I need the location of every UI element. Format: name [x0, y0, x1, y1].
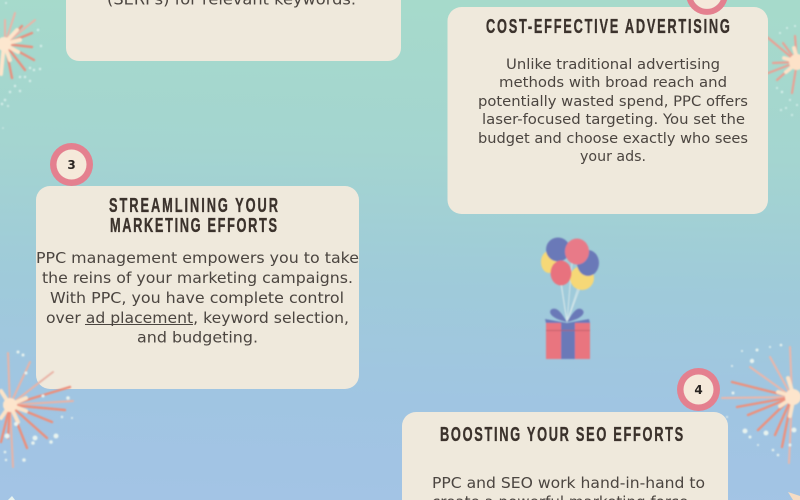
- badge: number 3: [50, 143, 93, 186]
- badge: number 4: [677, 368, 720, 411]
- text: cost-effective body: Unlike traditional advertising: [506, 57, 720, 73]
- firework: bottom left lower fragment: [8, 496, 15, 500]
- text: streamlining body: over ad placement, keyword selection,: [46, 309, 349, 327]
- illustration: balloons and gift box: [541, 238, 599, 359]
- panel: streamlining your marketing efforts: [36, 186, 359, 389]
- text: seo body: [432, 474, 705, 500]
- firework: top left: [0, 2, 42, 129]
- panel: search results card: [66, 0, 401, 61]
- text: cost-effective body: your ads.: [580, 149, 646, 165]
- text: streamlining body: the reins of your marketing campaigns.: [42, 269, 353, 287]
- heading: cost-effective advertising: COST-EFFECTIVE ADVERTISING: [486, 15, 730, 38]
- badge: number 2: [687, 0, 727, 15]
- heading: streamlining your marketing efforts: MARKETING EFFORTS: [110, 214, 277, 237]
- firework: top right: [763, 25, 800, 116]
- gift box: [546, 323, 590, 359]
- text: cost-effective body: methods with broad reach and: [499, 75, 727, 91]
- text: streamlining body: With PPC, you have complete control: [50, 289, 344, 307]
- yellow balloons: [541, 251, 594, 290]
- firework: bottom left: [1, 350, 73, 467]
- badge: number 4: 4: [694, 383, 703, 397]
- text: cost-effective body: potentially wasted spend, PPC offers: [478, 94, 748, 110]
- text: streamlining body: [36, 249, 359, 346]
- text: seo body: PPC and SEO work hand-in-hand to: [432, 474, 705, 492]
- red balloon front: [550, 260, 572, 286]
- firework: bottom right lower fragment: [788, 492, 800, 500]
- blue balloon left: [546, 238, 570, 262]
- badge: number 3: 3: [67, 158, 76, 172]
- blue balloon right: [577, 250, 599, 276]
- panel: cost-effective advertising: [448, 7, 768, 214]
- pink balloon top: [565, 238, 589, 264]
- firework: bottom right: [722, 344, 800, 463]
- text: streamlining body: and budgeting.: [137, 328, 258, 346]
- text: cost-effective body: [478, 57, 748, 165]
- panel: boosting your seo efforts: [402, 412, 728, 500]
- heading: streamlining your marketing efforts: [109, 194, 278, 237]
- text: cost-effective body: laser-focused targeting. You set the: [482, 112, 745, 128]
- text: cost-effective body: budget and choose exactly who sees: [478, 131, 748, 147]
- balloon strings: [558, 262, 585, 322]
- text: streamlining body: PPC management empowers you to take: [36, 249, 359, 267]
- heading: streamlining your marketing efforts: STREAMLINING YOUR: [109, 194, 278, 217]
- gift bow: [545, 309, 590, 323]
- heading: boosting your seo efforts: BOOSTING YOUR SEO EFFORTS: [440, 423, 683, 446]
